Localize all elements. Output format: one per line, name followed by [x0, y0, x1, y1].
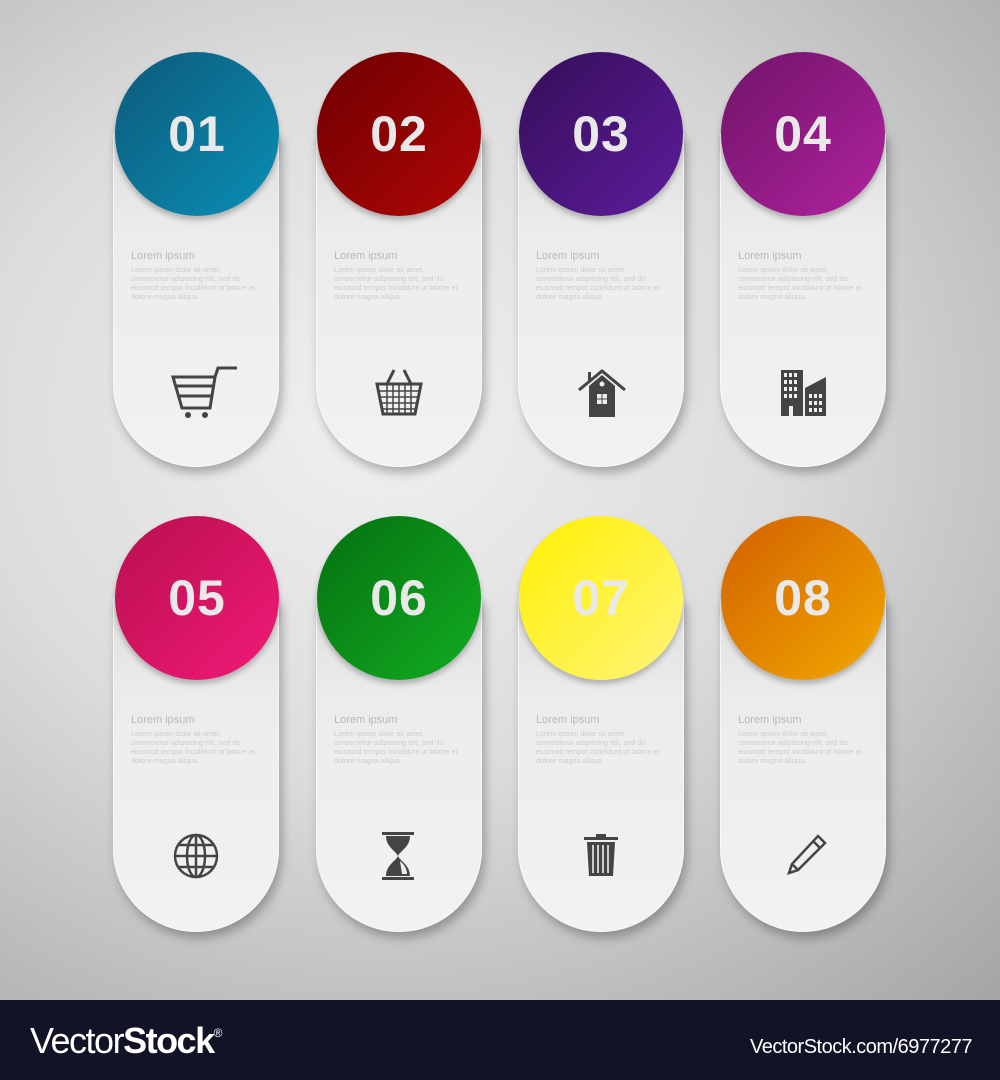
- text 08: consectetur adipiscing elit, sed do: [738, 738, 848, 747]
- text 03: Lorem ipsum: [536, 250, 600, 262]
- circle 03: [519, 52, 683, 216]
- text 02: dolore magna aliqua.: [334, 292, 402, 301]
- text 03: [536, 250, 660, 301]
- circle 02: [317, 52, 481, 216]
- text 08: dolore magna aliqua.: [738, 756, 806, 765]
- text 01: eiusmod tempor incididunt ut labore et: [131, 283, 255, 292]
- text 02: [334, 250, 458, 301]
- text 07: Lorem ipsum: [536, 714, 600, 726]
- circle 04: 04: [774, 106, 832, 162]
- text 04: eiusmod tempor incididunt ut labore et: [738, 283, 862, 292]
- text 04: Lorem ipsum: [738, 250, 802, 262]
- text 05: eiusmod tempor incididunt ut labore et: [131, 747, 255, 756]
- text 05: consectetur adipiscing elit, sed do: [131, 738, 241, 747]
- icon: buildings: [781, 370, 826, 416]
- text 06: Lorem ipsum dolor sit amet,: [334, 729, 424, 738]
- icon: cart: [171, 366, 237, 418]
- text 01: dolore magna aliqua.: [131, 292, 199, 301]
- icon: trash: [584, 834, 618, 876]
- text 02: eiusmod tempor incididunt ut labore et: [334, 283, 458, 292]
- text 01: Lorem ipsum: [131, 250, 195, 262]
- text 04: dolore magna aliqua.: [738, 292, 806, 301]
- icon: house: [578, 369, 626, 417]
- text 07: Lorem ipsum dolor sit amet,: [536, 729, 626, 738]
- footer url: VectorStock.com/6977277: [750, 1036, 972, 1058]
- card 04: [720, 133, 886, 467]
- text 08: Lorem ipsum dolor sit amet,: [738, 729, 828, 738]
- circle 08: 08: [774, 570, 832, 626]
- circle 08: [721, 516, 885, 680]
- circle 02: 02: [370, 106, 428, 162]
- card 08: [720, 598, 886, 932]
- text 08: eiusmod tempor incididunt ut labore et: [738, 747, 862, 756]
- text 07: [536, 714, 660, 765]
- text 01: consectetur adipiscing elit, sed do: [131, 274, 241, 283]
- text 01: [131, 250, 255, 301]
- icon: globe: [174, 834, 218, 878]
- icon: basket: [375, 369, 423, 416]
- text 04: [738, 250, 862, 301]
- text 07: consectetur adipiscing elit, sed do: [536, 738, 646, 747]
- text 07: eiusmod tempor incididunt ut labore et: [536, 747, 660, 756]
- text 07: dolore magna aliqua.: [536, 756, 604, 765]
- circle 07: 07: [572, 570, 630, 626]
- footer logo: VectorStock®: [30, 1020, 221, 1061]
- circle 01: [115, 52, 279, 216]
- text 06: dolore magna aliqua.: [334, 756, 402, 765]
- card 07: [518, 598, 684, 932]
- text 04: consectetur adipiscing elit, sed do: [738, 274, 848, 283]
- footer bar: [0, 1000, 1000, 1080]
- icon: pencil: [787, 834, 827, 875]
- circle 05: [115, 516, 279, 680]
- text 02: Lorem ipsum: [334, 250, 398, 262]
- text 02: consectetur adipiscing elit, sed do: [334, 274, 444, 283]
- text 03: dolore magna aliqua.: [536, 292, 604, 301]
- text 01: Lorem ipsum dolor sit amet,: [131, 265, 221, 274]
- text 06: consectetur adipiscing elit, sed do: [334, 738, 444, 747]
- text 03: Lorem ipsum dolor sit amet,: [536, 265, 626, 274]
- text 06: Lorem ipsum: [334, 714, 398, 726]
- text 08: [738, 714, 862, 765]
- circle 01: 01: [168, 106, 226, 162]
- circle 07: [519, 516, 683, 680]
- text 05: Lorem ipsum dolor sit amet,: [131, 729, 221, 738]
- circle 06: [317, 516, 481, 680]
- circle 03: 03: [572, 106, 630, 162]
- text 08: Lorem ipsum: [738, 714, 802, 726]
- text 06: eiusmod tempor incididunt ut labore et: [334, 747, 458, 756]
- text 06: [334, 714, 458, 765]
- card 01: [113, 133, 279, 467]
- circle 05: 05: [168, 570, 226, 626]
- text 05: Lorem ipsum: [131, 714, 195, 726]
- text 04: Lorem ipsum dolor sit amet,: [738, 265, 828, 274]
- card 05: [113, 598, 279, 932]
- card 03: [518, 133, 684, 467]
- text 05: [131, 714, 255, 765]
- icon: hourglass: [382, 832, 414, 880]
- text 05: dolore magna aliqua.: [131, 756, 199, 765]
- circle 06: 06: [370, 570, 428, 626]
- text 02: Lorem ipsum dolor sit amet,: [334, 265, 424, 274]
- card 02: [316, 133, 482, 467]
- card 06: [316, 598, 482, 932]
- text 03: eiusmod tempor incididunt ut labore et: [536, 283, 660, 292]
- circle 04: [721, 52, 885, 216]
- text 03: consectetur adipiscing elit, sed do: [536, 274, 646, 283]
